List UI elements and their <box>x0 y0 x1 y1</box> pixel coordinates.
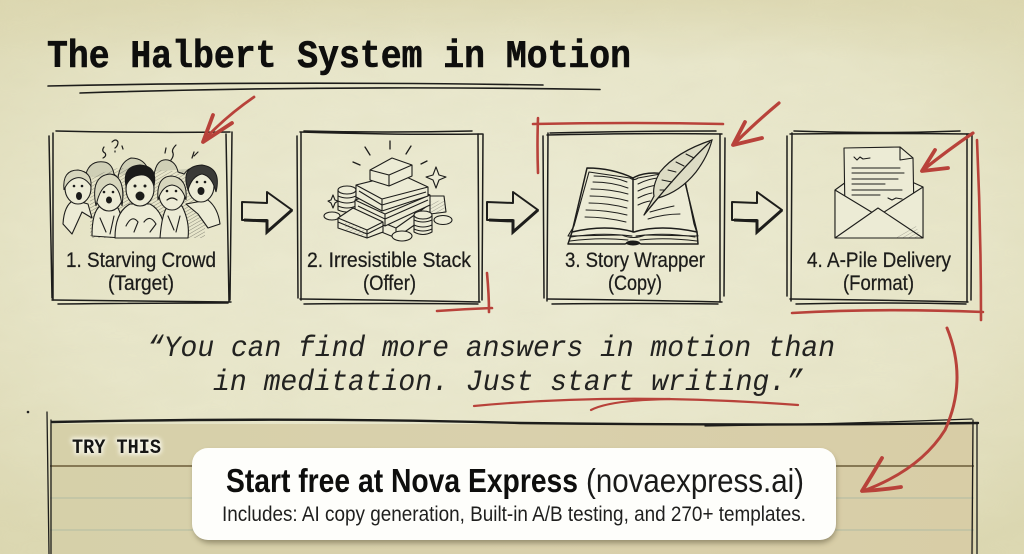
label: step 2: (Offer) <box>363 271 416 295</box>
hands on chests <box>100 216 180 234</box>
label: step 3 <box>565 248 705 295</box>
red annotation: arrow to step 4 <box>922 133 973 171</box>
hair <box>125 165 155 186</box>
ruled lines <box>50 466 974 530</box>
icon: worried crowd <box>63 140 220 238</box>
quote <box>147 332 835 400</box>
panel: step 4 a-pile delivery <box>787 131 972 304</box>
label: step 4: (Format) <box>843 271 914 295</box>
sketched frame 1 <box>49 131 232 304</box>
try this tag: TRY THIS <box>72 437 161 460</box>
call to action card: Start free at Nova Express <box>226 462 578 499</box>
sketched frame 4 <box>787 131 972 304</box>
red annotation: arrow to step 3 <box>733 103 779 145</box>
sparkles <box>426 167 446 188</box>
coin stack right <box>414 211 432 234</box>
panel: step 1 starving crowd <box>49 131 232 304</box>
bundle of notes <box>338 208 383 238</box>
panel: try this <box>47 412 978 554</box>
arrow: step 3 to 4 <box>732 192 782 232</box>
call to action card: (novaexpress.ai) <box>586 462 804 499</box>
red annotation: corner on step 2 <box>437 273 492 312</box>
quote: in meditation. Just start writing.” <box>213 366 804 400</box>
faces <box>65 170 214 211</box>
red annotation: corner on step 4 <box>792 140 983 320</box>
sketched frame 3 <box>543 131 725 304</box>
coin stack left <box>338 186 356 212</box>
title: The Halbert System in Motion <box>47 35 631 79</box>
label: step 4: 4. A-Pile Delivery <box>807 248 951 272</box>
quote: “You can find more answers in motion than <box>147 332 835 366</box>
call to action card: Includes: AI copy generation, Built-in A/B testing, and 270+ templates. <box>222 503 806 526</box>
arrow: step 2 to 3 <box>487 192 538 232</box>
panel frame <box>47 412 978 554</box>
book 3 <box>362 195 430 238</box>
label: step 1: 1. Starving Crowd <box>66 248 216 272</box>
book 1 <box>356 174 428 211</box>
rays <box>353 141 427 165</box>
label: step 3: 3. Story Wrapper <box>565 248 705 272</box>
label: step 3: (Copy) <box>608 271 662 295</box>
label: step 4 <box>807 248 951 295</box>
top gold bar <box>370 158 412 186</box>
quill <box>644 140 712 215</box>
try this tag: TRY THIS <box>72 437 161 460</box>
bodies <box>63 200 220 238</box>
book 2 <box>355 184 430 226</box>
red annotation: quote underline <box>474 399 798 410</box>
red annotation: corner on step 3 <box>533 118 723 173</box>
red annotation: arrow to step 1 <box>203 97 254 142</box>
arrow: step 1 to 2 <box>242 192 292 232</box>
panel: step 3 story wrapper <box>543 131 725 304</box>
sketched frame 2 <box>297 131 483 304</box>
label: step 1 <box>66 248 216 295</box>
label: step 1: (Target) <box>108 271 174 295</box>
icon: stack of gold and coins <box>324 141 452 241</box>
panel: step 2 irresistible stack <box>297 131 483 304</box>
icon: envelope with letter <box>835 147 923 238</box>
call to action card <box>192 448 836 540</box>
icon: open book and quill <box>568 140 712 246</box>
worry marks <box>103 140 198 160</box>
red arrow: delivery to call to action <box>862 328 957 491</box>
label: step 2: 2. Irresistible Stack <box>307 248 471 272</box>
title underline <box>48 83 600 93</box>
jar <box>428 196 446 214</box>
label: step 2 <box>307 248 471 295</box>
card shadow <box>194 452 836 543</box>
eyes and mouths <box>73 181 206 204</box>
